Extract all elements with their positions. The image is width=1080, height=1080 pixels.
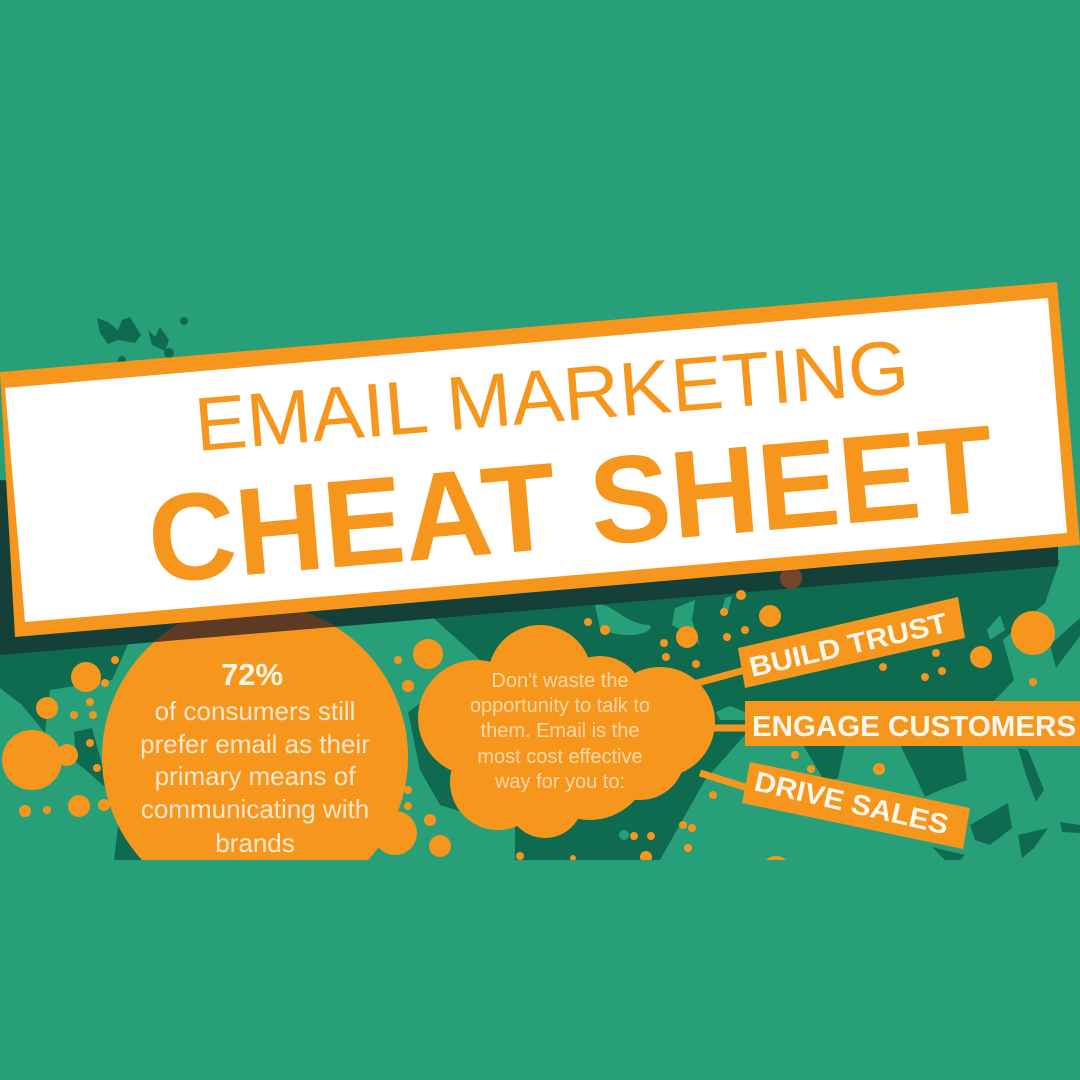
stat text: prefer email as their <box>140 729 370 759</box>
cloud text <box>470 670 650 793</box>
map land: borneo <box>970 803 1012 845</box>
splatter dots <box>2 590 1055 886</box>
stat circle shadowed part <box>154 612 336 642</box>
stat text <box>140 657 370 858</box>
stat text: brands <box>215 828 295 858</box>
map sea: persian gulf <box>716 706 745 720</box>
label: drive sales: DRIVE SALES <box>752 766 952 840</box>
label: build trust: BUILD TRUST <box>746 607 950 683</box>
world map <box>0 317 1080 860</box>
banner frame <box>0 282 1080 637</box>
map land: philippines <box>1018 748 1044 802</box>
label: drive sales <box>742 762 970 849</box>
map land: india <box>804 746 845 780</box>
stat circle <box>102 612 417 860</box>
map land: left <box>0 640 130 733</box>
title line 1: EMAIL MARKETING <box>191 325 912 468</box>
stat text: primary means of <box>155 761 356 791</box>
map land: sumatra <box>932 847 965 860</box>
map land: indonesia <box>1018 828 1048 858</box>
label: build trust <box>738 597 965 688</box>
cloud text: them. Email is the <box>481 720 639 742</box>
shadowed dot <box>780 567 802 589</box>
cloud text: most cost effective <box>477 746 643 768</box>
connector lines <box>690 670 750 788</box>
map sea: korea coast <box>987 615 1005 640</box>
cloud text: Don't waste the <box>491 670 629 692</box>
title line 2: CHEAT SHEET <box>143 400 999 610</box>
map land: africa strip <box>408 700 462 812</box>
cloud <box>418 625 715 838</box>
stat text: communicating with <box>141 794 369 824</box>
stat text: of consumers still <box>155 696 355 726</box>
map land: top scraps <box>97 317 188 364</box>
map land: lower left <box>114 826 142 860</box>
cloud text: way for you to: <box>494 771 625 793</box>
map land: left inner <box>74 728 105 788</box>
banner shadow <box>0 480 1058 655</box>
map land: japan <box>1050 618 1080 668</box>
map sea: caspian <box>672 600 700 645</box>
map land: south-east asia <box>900 745 967 797</box>
map sea: red sea spot <box>619 830 629 840</box>
label: engage customers: ENGAGE CUSTOMERS <box>752 711 1076 743</box>
map sea: aral <box>722 596 732 612</box>
map sea: black sea <box>595 604 650 635</box>
map land: central asia <box>430 560 1060 860</box>
banner white panel <box>5 298 1067 622</box>
label: engage customers <box>745 701 1080 746</box>
stat text: 72% <box>221 657 283 692</box>
cloud text: opportunity to talk to <box>470 695 650 717</box>
